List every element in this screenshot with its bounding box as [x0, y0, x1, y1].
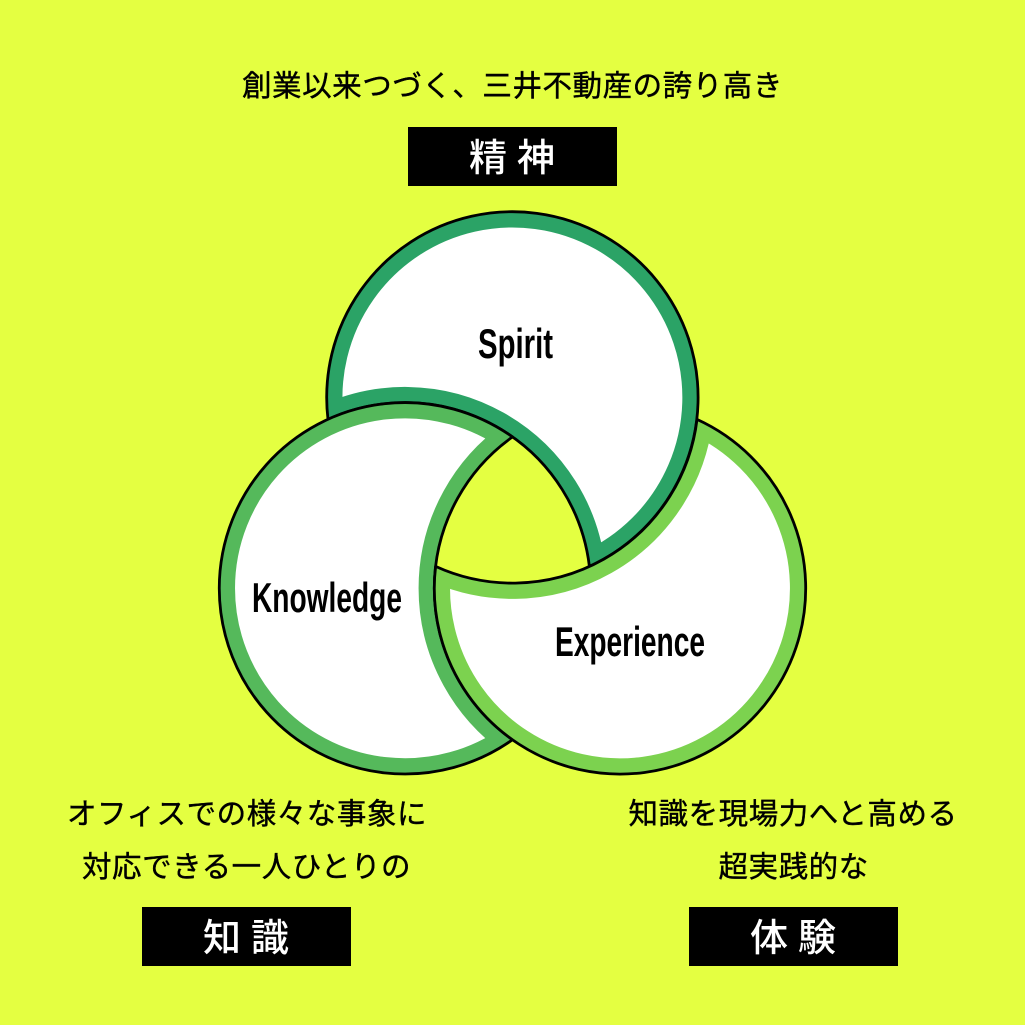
label box: 知識 [142, 907, 351, 966]
text block: experience description: 知識を現場力へと高める [628, 798, 958, 831]
label box: 体験: 体験 [750, 918, 846, 960]
text block: experience description [628, 798, 958, 884]
heading: spirit tagline: 創業以来つづく、三井不動産の誇り高き [242, 70, 783, 103]
text block: knowledge description: 対応できる一人ひとりの [82, 851, 411, 884]
crescent: Spirit [327, 212, 698, 566]
label: Knowledge: Knowledge [252, 574, 402, 621]
label box: 知識: 知識 [203, 918, 299, 960]
label box: 精神: 精神 [469, 138, 565, 180]
text block: knowledge description [67, 798, 427, 884]
label box: 体験 [689, 907, 898, 966]
text block: knowledge description: オフィスでの様々な事象に [67, 798, 427, 831]
label box: 精神 [408, 127, 617, 186]
crescent: Experience [434, 419, 806, 774]
diagram: three interlocking circles [219, 212, 806, 774]
label: Spirit: Spirit [478, 320, 553, 367]
crescent: Knowledge [219, 403, 512, 774]
label: Experience: Experience [555, 618, 705, 665]
text block: experience description: 超実践的な [718, 851, 869, 884]
